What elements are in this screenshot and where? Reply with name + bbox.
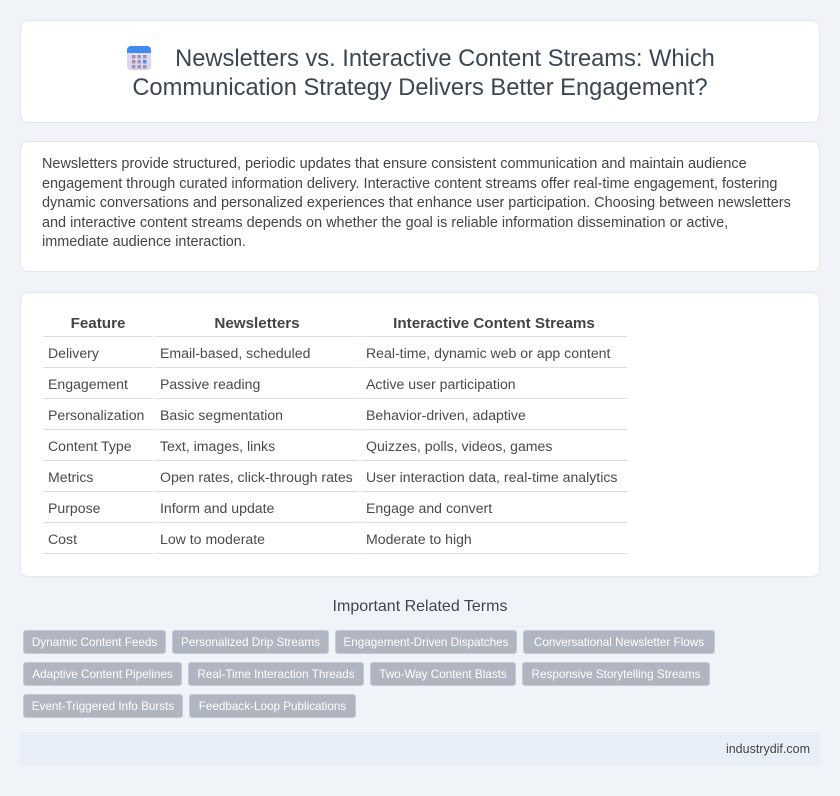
comparison table: Moderate to high [366, 531, 472, 547]
comparison table: Behavior-driven, adaptive [366, 407, 526, 423]
comparison table: Interactive Content Streams [393, 315, 595, 332]
comparison table: Newsletters [214, 315, 300, 332]
comparison table: Engage and convert [366, 500, 492, 516]
intro text: and interactive content streams depends on whether the goal is reliable information dissemination or active, [42, 214, 728, 230]
comparison table: Basic segmentation [160, 407, 283, 423]
related terms tags: Real-Time Interaction Threads [197, 668, 355, 681]
related terms tags [23, 630, 715, 718]
comparison table: User interaction data, real-time analytics [366, 469, 617, 485]
intro text: engagement through curated information delivery. Interactive content streams offer real-time engagement, fostering [42, 176, 777, 192]
related terms tags: Event-Triggered Info Bursts [32, 700, 174, 713]
header card [20, 20, 820, 123]
related terms tags: Two-Way Content Blasts [379, 668, 507, 681]
comparison table: Quizzes, polls, videos, games [366, 438, 552, 454]
comparison table: Engagement [48, 376, 128, 392]
comparison table: Inform and update [160, 500, 274, 516]
comparison table: Content Type [48, 438, 132, 454]
intro text [42, 156, 791, 250]
intro text: dynamic conversations and personalized experiences that enhance user participation. Choosing between newsletters [42, 195, 791, 211]
comparison table: Low to moderate [160, 531, 265, 547]
related terms heading: Important Related Terms [333, 598, 507, 615]
comparison table: Email-based, scheduled [160, 345, 310, 361]
comparison table: Delivery [48, 345, 99, 361]
related terms tags: Engagement-Driven Dispatches [343, 636, 508, 649]
related terms tags: Personalized Drip Streams [181, 636, 320, 649]
comparison table: Purpose [48, 500, 100, 516]
comparison table: Active user participation [366, 376, 516, 392]
related terms tags: Responsive Storytelling Streams [532, 668, 700, 681]
comparison table: Metrics [48, 469, 93, 485]
comparison table: Cost [48, 531, 77, 547]
comparison table [43, 315, 627, 554]
comparison table: Personalization [48, 407, 144, 423]
title: Communication Strategy Delivers Better Engagement? [132, 75, 708, 101]
comparison table: Passive reading [160, 376, 260, 392]
comparison table: Text, images, links [160, 438, 275, 454]
icon: calendar [127, 46, 151, 70]
title: Newsletters vs. Interactive Content Streams: Which [175, 46, 715, 72]
comparison table: Open rates, click-through rates [160, 469, 353, 485]
related terms tags: Adaptive Content Pipelines [32, 668, 173, 681]
related terms tags: Conversational Newsletter Flows [534, 636, 704, 649]
comparison table: Real-time, dynamic web or app content [366, 345, 610, 361]
footer: industrydif.com [726, 742, 810, 756]
intro text: immediate audience interaction. [42, 234, 246, 250]
title [132, 46, 715, 101]
related terms tags: Feedback-Loop Publications [199, 700, 346, 713]
related terms tags: Dynamic Content Feeds [32, 636, 157, 649]
intro text: Newsletters provide structured, periodic updates that ensure consistent communication and maintain audience [42, 156, 747, 172]
comparison table: Feature [71, 315, 125, 332]
footer [20, 732, 820, 766]
intro card [20, 141, 820, 272]
comparison table card [20, 292, 820, 577]
